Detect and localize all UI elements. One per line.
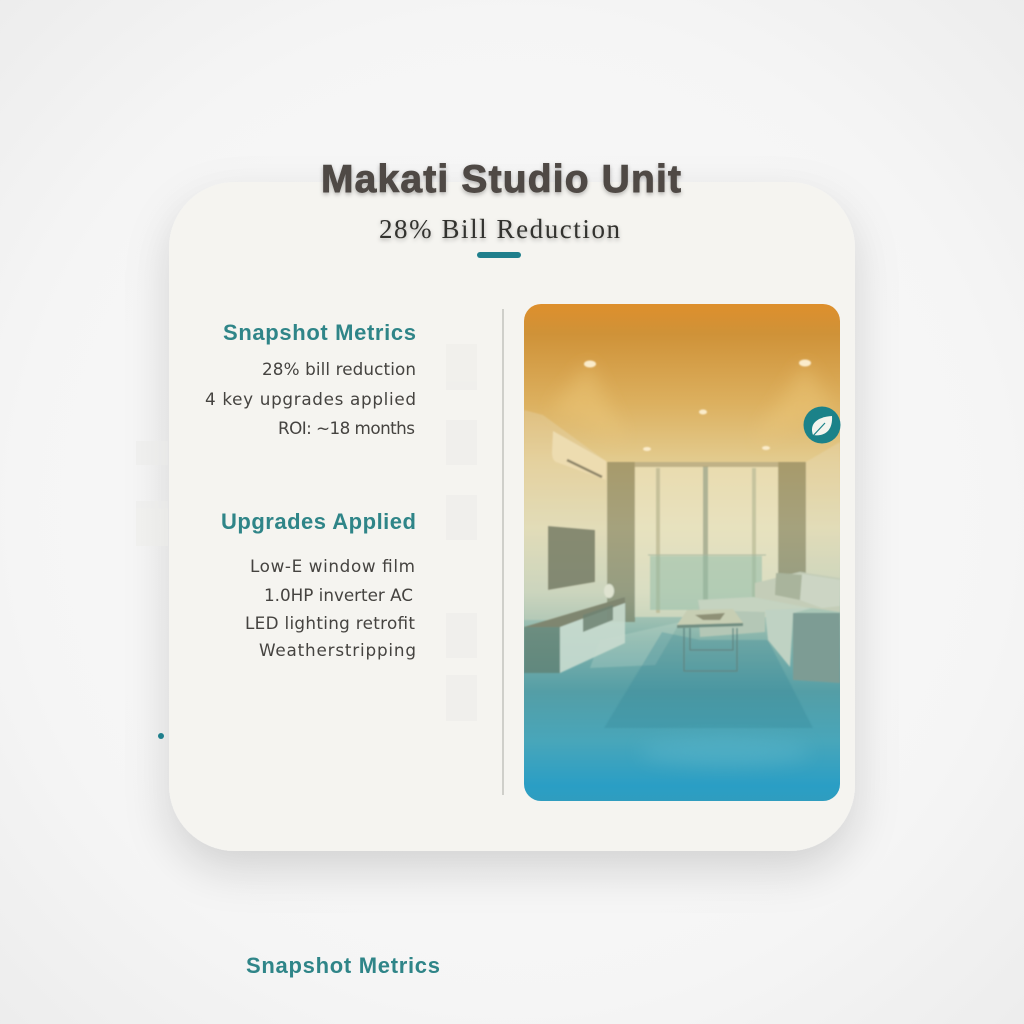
- tv console: [524, 597, 625, 673]
- upgrades list: LED lighting retrofit: [245, 613, 415, 633]
- panel: main card: [169, 182, 855, 851]
- walls: [524, 410, 607, 620]
- title underline accent: [477, 252, 521, 258]
- column divider: [502, 309, 504, 795]
- upgrades list: [245, 556, 416, 660]
- tv: [548, 526, 595, 590]
- panel: snapshot metrics: [205, 320, 416, 438]
- sofa: [698, 572, 840, 683]
- vase: [604, 584, 614, 598]
- floor glow: [658, 745, 793, 766]
- upgrades list: Weatherstripping: [259, 640, 416, 660]
- air conditioner: [552, 431, 606, 480]
- metrics list: ROI: ~18 months: [278, 418, 415, 438]
- heading: upgrades applied: Upgrades Applied: [221, 509, 416, 534]
- floor sheen: [590, 622, 680, 668]
- upgrades list: Low-E window film: [250, 556, 415, 576]
- small teal dot: [158, 733, 164, 739]
- image: living room interior: [524, 304, 840, 801]
- panel: upgrades applied: [221, 509, 416, 660]
- upgrades list: 1.0HP inverter AC: [264, 585, 413, 605]
- ceiling lights: [584, 360, 811, 451]
- heading: snapshot metrics: Snapshot Metrics: [223, 320, 416, 345]
- title: Makati Studio Unit: [321, 158, 681, 201]
- ceiling glow: [562, 370, 825, 416]
- metrics list: 28% bill reduction: [262, 359, 416, 379]
- window: [635, 462, 778, 617]
- curtains: [607, 462, 635, 622]
- subtitle: 28% Bill Reduction: [379, 214, 620, 244]
- footer label: snapshot metrics: Snapshot Metrics: [246, 953, 440, 978]
- coffee table: [677, 609, 743, 671]
- rug: [604, 632, 813, 728]
- metrics list: 4 key upgrades applied: [205, 389, 416, 409]
- icon: leaf badge: [804, 406, 840, 444]
- faint artefact patches: [136, 344, 477, 721]
- metrics list: [205, 359, 416, 438]
